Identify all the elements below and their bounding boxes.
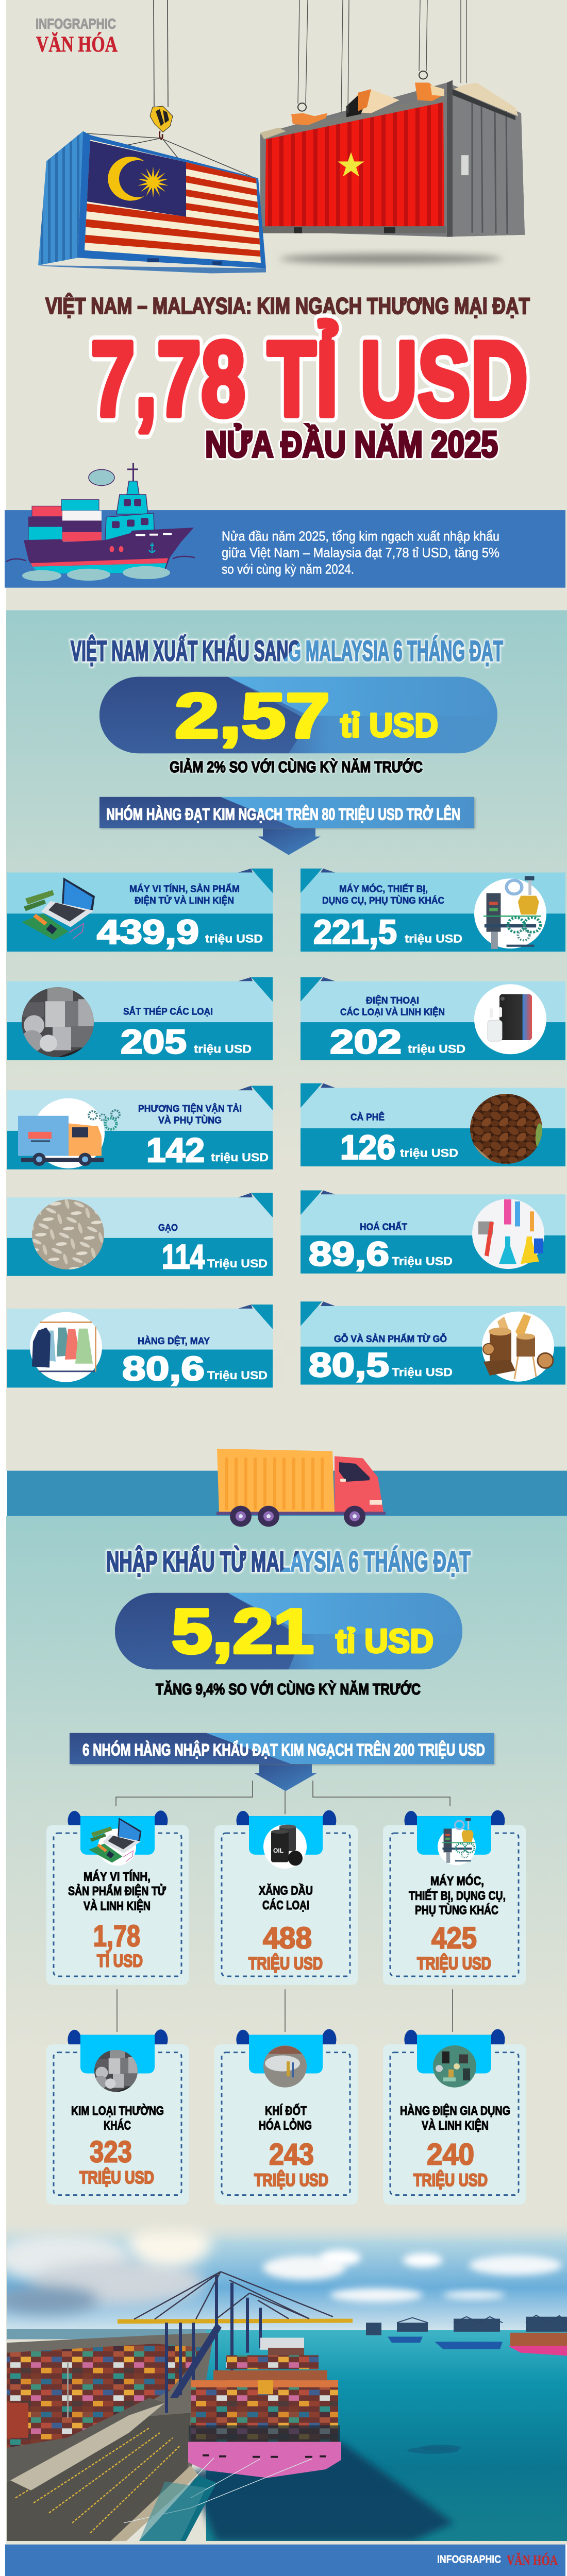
- import card: household electrics: VÀ LINH KIỆN: [422, 2119, 489, 2132]
- import card: household electrics: 240: [427, 2137, 474, 2171]
- import banner: [70, 1733, 495, 1765]
- card: computers and electronics: MÁY VI TÍNH, SẢN PHẨM: [129, 884, 240, 894]
- icon: laptop: [22, 877, 95, 940]
- import change note: TĂNG 9,4% SO VỚI CÙNG KỲ NĂM TRƯỚC: [156, 1680, 421, 1698]
- card: textiles: [7, 1304, 273, 1388]
- import card: liquefied gas: KHÍ ĐỐT: [265, 2104, 307, 2118]
- card: steel: 205: [121, 1023, 187, 1061]
- intro paragraph: so với cùng kỳ năm 2024.: [222, 562, 354, 577]
- icon: delivery truck: [18, 1110, 120, 1166]
- card: coffee: 126: [340, 1128, 395, 1166]
- export section background: [6, 610, 567, 1471]
- icon: lab flasks: [478, 1199, 543, 1264]
- icon: clothes on rail: [32, 1321, 96, 1372]
- export total pill: tỉ USD: [340, 706, 438, 744]
- icon: orange container truck: [216, 1449, 386, 1527]
- import card: machinery: [383, 1810, 526, 1985]
- logo: Infographic Văn Hóa: VĂN HÓA: [36, 31, 118, 57]
- card: rice: GẠO: [158, 1222, 178, 1233]
- import card: machinery: MÁY MÓC,: [430, 1874, 484, 1888]
- card: computers and electronics: 439,9: [97, 913, 199, 951]
- card: steel: triệu USD: [194, 1042, 252, 1055]
- intro paragraph: giữa Việt Nam – Malaysia đạt 7,78 tỉ USD, tăng 5%: [222, 545, 499, 560]
- import card: machinery: TRIỆU USD: [417, 1953, 491, 1973]
- intro band: [5, 510, 565, 588]
- card: coffee: [301, 1083, 565, 1166]
- card: wood: GỖ VÀ SẢN PHẨM TỪ GỖ: [334, 1333, 447, 1344]
- photo: circuit board: [433, 2045, 476, 2088]
- card: rice: Triệu USD: [207, 1257, 268, 1270]
- import card: computers: VÀ LINH KIỆN: [84, 1899, 151, 1913]
- crane cables above Vietnam container: [298, 0, 466, 113]
- card: phones: CÁC LOẠI VÀ LINH KIỆN: [340, 1007, 445, 1017]
- card: machinery: DỤNG CỤ, PHỤ TÙNG KHÁC: [322, 895, 444, 906]
- card: coffee: CÀ PHÊ: [351, 1112, 385, 1122]
- photo: metal: [94, 2050, 138, 2092]
- icon: machinery: [442, 1818, 475, 1863]
- import card: household electrics: TRIỆU USD: [413, 2170, 488, 2190]
- import card: computers: TỈ USD: [97, 1951, 143, 1971]
- card: coffee: triệu USD: [400, 1146, 458, 1159]
- photo: container port and ship: [0, 2217, 567, 2541]
- photo: rice: [32, 1199, 104, 1269]
- export total pill: [99, 677, 497, 753]
- card: vehicles: VÀ PHỤ TÙNG: [158, 1115, 222, 1125]
- connector lines: [116, 1781, 453, 2032]
- container: Malaysia flag: [38, 131, 266, 274]
- card: vehicles: [7, 1086, 273, 1170]
- import total pill: tỉ USD: [336, 1622, 433, 1659]
- card: wood: Triệu USD: [392, 1365, 453, 1379]
- export change note: GIẢM 2% SO VỚI CÙNG KỲ NĂM TRƯỚC: [170, 758, 423, 776]
- import card: liquefied gas: [214, 2029, 358, 2205]
- icon: oil barrels: OIL: [273, 1847, 284, 1854]
- import card: base metals: KHÁC: [104, 2119, 131, 2132]
- card: wood: [301, 1301, 565, 1385]
- icon: cargo ship: [6, 463, 195, 581]
- card: computers and electronics: [7, 869, 273, 952]
- card: vehicles: triệu USD: [211, 1150, 269, 1164]
- export change note: GIẢM 2% SO VỚI CÙNG KỲ NĂM TRƯỚC: [170, 758, 423, 776]
- card: rice: [7, 1193, 273, 1276]
- card: chemicals: Triệu USD: [392, 1255, 453, 1267]
- footer band: [5, 2545, 565, 2576]
- card: machinery: [301, 869, 565, 952]
- card: textiles: HÀNG DỆT, MAY: [138, 1335, 210, 1346]
- import card: household electrics: HÀNG ĐIỆN GIA DỤNG: [400, 2104, 510, 2118]
- card: rice: 114: [162, 1238, 205, 1276]
- import card: liquefied gas: 243: [269, 2137, 314, 2171]
- logo: Infographic Văn Hóa: [36, 16, 118, 57]
- import card: petroleum: CÁC LOẠI: [262, 1898, 309, 1912]
- export total pill: 2,57: [175, 681, 330, 751]
- intro paragraph: [222, 529, 499, 577]
- icon: oil barrels: [271, 1825, 303, 1866]
- subtitle: Nửa đầu năm 2025: NỬA ĐẦU NĂM 2025: [205, 424, 498, 465]
- import card: machinery: 425: [431, 1921, 477, 1955]
- logo: Infographic Văn Hóa: INFOGRAPHIC: [36, 16, 116, 32]
- container: Vietnam flag: [260, 71, 525, 237]
- import card: liquefied gas: HÓA LỎNG: [259, 2118, 312, 2132]
- import card: base metals: TRIỆU USD: [79, 2167, 154, 2188]
- shadow beneath Vietnam container: [280, 254, 502, 264]
- icon: phone and earbuds: [488, 994, 532, 1041]
- import card: computers: [46, 1810, 189, 1985]
- photo: steel: [21, 987, 94, 1057]
- import section background: [6, 1516, 567, 2545]
- import card: base metals: KIM LOẠI THƯỜNG: [71, 2104, 164, 2118]
- subtitle: Nửa đầu năm 2025: NỬA ĐẦU NĂM 2025: [205, 424, 498, 465]
- card: chemicals: [301, 1191, 565, 1274]
- import card: petroleum: [214, 1810, 358, 1985]
- import card: machinery: PHỤ TÙNG KHÁC: [415, 1903, 498, 1917]
- photo: coffee beans: [470, 1094, 544, 1164]
- divider band: [7, 1471, 567, 1516]
- card: steel: [7, 977, 273, 1061]
- arrow: export groups: [258, 828, 321, 855]
- card: phones: triệu USD: [408, 1042, 465, 1055]
- import card: petroleum: XĂNG DẦU: [259, 1884, 313, 1898]
- card: textiles: Triệu USD: [207, 1368, 268, 1382]
- export banner: [99, 797, 475, 829]
- import card: base metals: 323: [90, 2134, 132, 2168]
- card: phones: [301, 977, 565, 1061]
- card: machinery: triệu USD: [405, 932, 462, 945]
- card: phones: 202: [330, 1023, 402, 1061]
- card: steel: SẮT THÉP CÁC LOẠI: [123, 1006, 213, 1016]
- card: phones: ĐIỆN THOẠI: [366, 995, 419, 1006]
- icon: machinery: [483, 876, 541, 949]
- card: chemicals: 89,6: [309, 1235, 389, 1273]
- import card: petroleum: 488: [263, 1921, 312, 1955]
- page background: header section: [6, 0, 567, 610]
- footer band: INFOGRAPHIC: [437, 2553, 501, 2566]
- import card: computers: MÁY VI TÍNH,: [84, 1870, 151, 1884]
- icon: laptop: [89, 1818, 141, 1862]
- import card: household electrics: [383, 2029, 526, 2205]
- arrow: import groups: [254, 1764, 317, 1791]
- card: vehicles: PHƯƠNG TIỆN VẬN TẢI: [138, 1103, 242, 1114]
- card: wood: 80,5: [309, 1346, 389, 1384]
- import card: computers: 1,78: [93, 1919, 140, 1953]
- import total pill: [115, 1593, 462, 1669]
- card: computers and electronics: triệu USD: [205, 932, 263, 945]
- import total pill: 5,21: [172, 1597, 314, 1667]
- card: machinery: MÁY MÓC, THIẾT BỊ,: [339, 884, 428, 894]
- card: machinery: 221,5: [313, 913, 397, 951]
- photo: gas tank: [263, 2045, 307, 2088]
- import card: petroleum: TRIỆU USD: [248, 1953, 323, 1973]
- import card: liquefied gas: TRIỆU USD: [254, 2170, 328, 2190]
- card: computers and electronics: ĐIỆN TỬ VÀ LINH KIỆN: [135, 895, 234, 906]
- import card: base metals: [46, 2029, 189, 2205]
- import card: computers: SẢN PHẨM ĐIỆN TỬ: [68, 1884, 166, 1898]
- card: vehicles: 142: [146, 1131, 205, 1170]
- crane cables and hook: [81, 0, 253, 177]
- intro paragraph: Nửa đầu năm 2025, tổng kim ngạch xuất nhập khẩu: [222, 529, 499, 544]
- icon: logs and stool: [483, 1314, 553, 1379]
- card: textiles: 80,6: [122, 1350, 205, 1388]
- card: chemicals: HOÁ CHẤT: [360, 1222, 408, 1232]
- import card: machinery: THIẾT BỊ, DỤNG CỤ,: [409, 1889, 506, 1903]
